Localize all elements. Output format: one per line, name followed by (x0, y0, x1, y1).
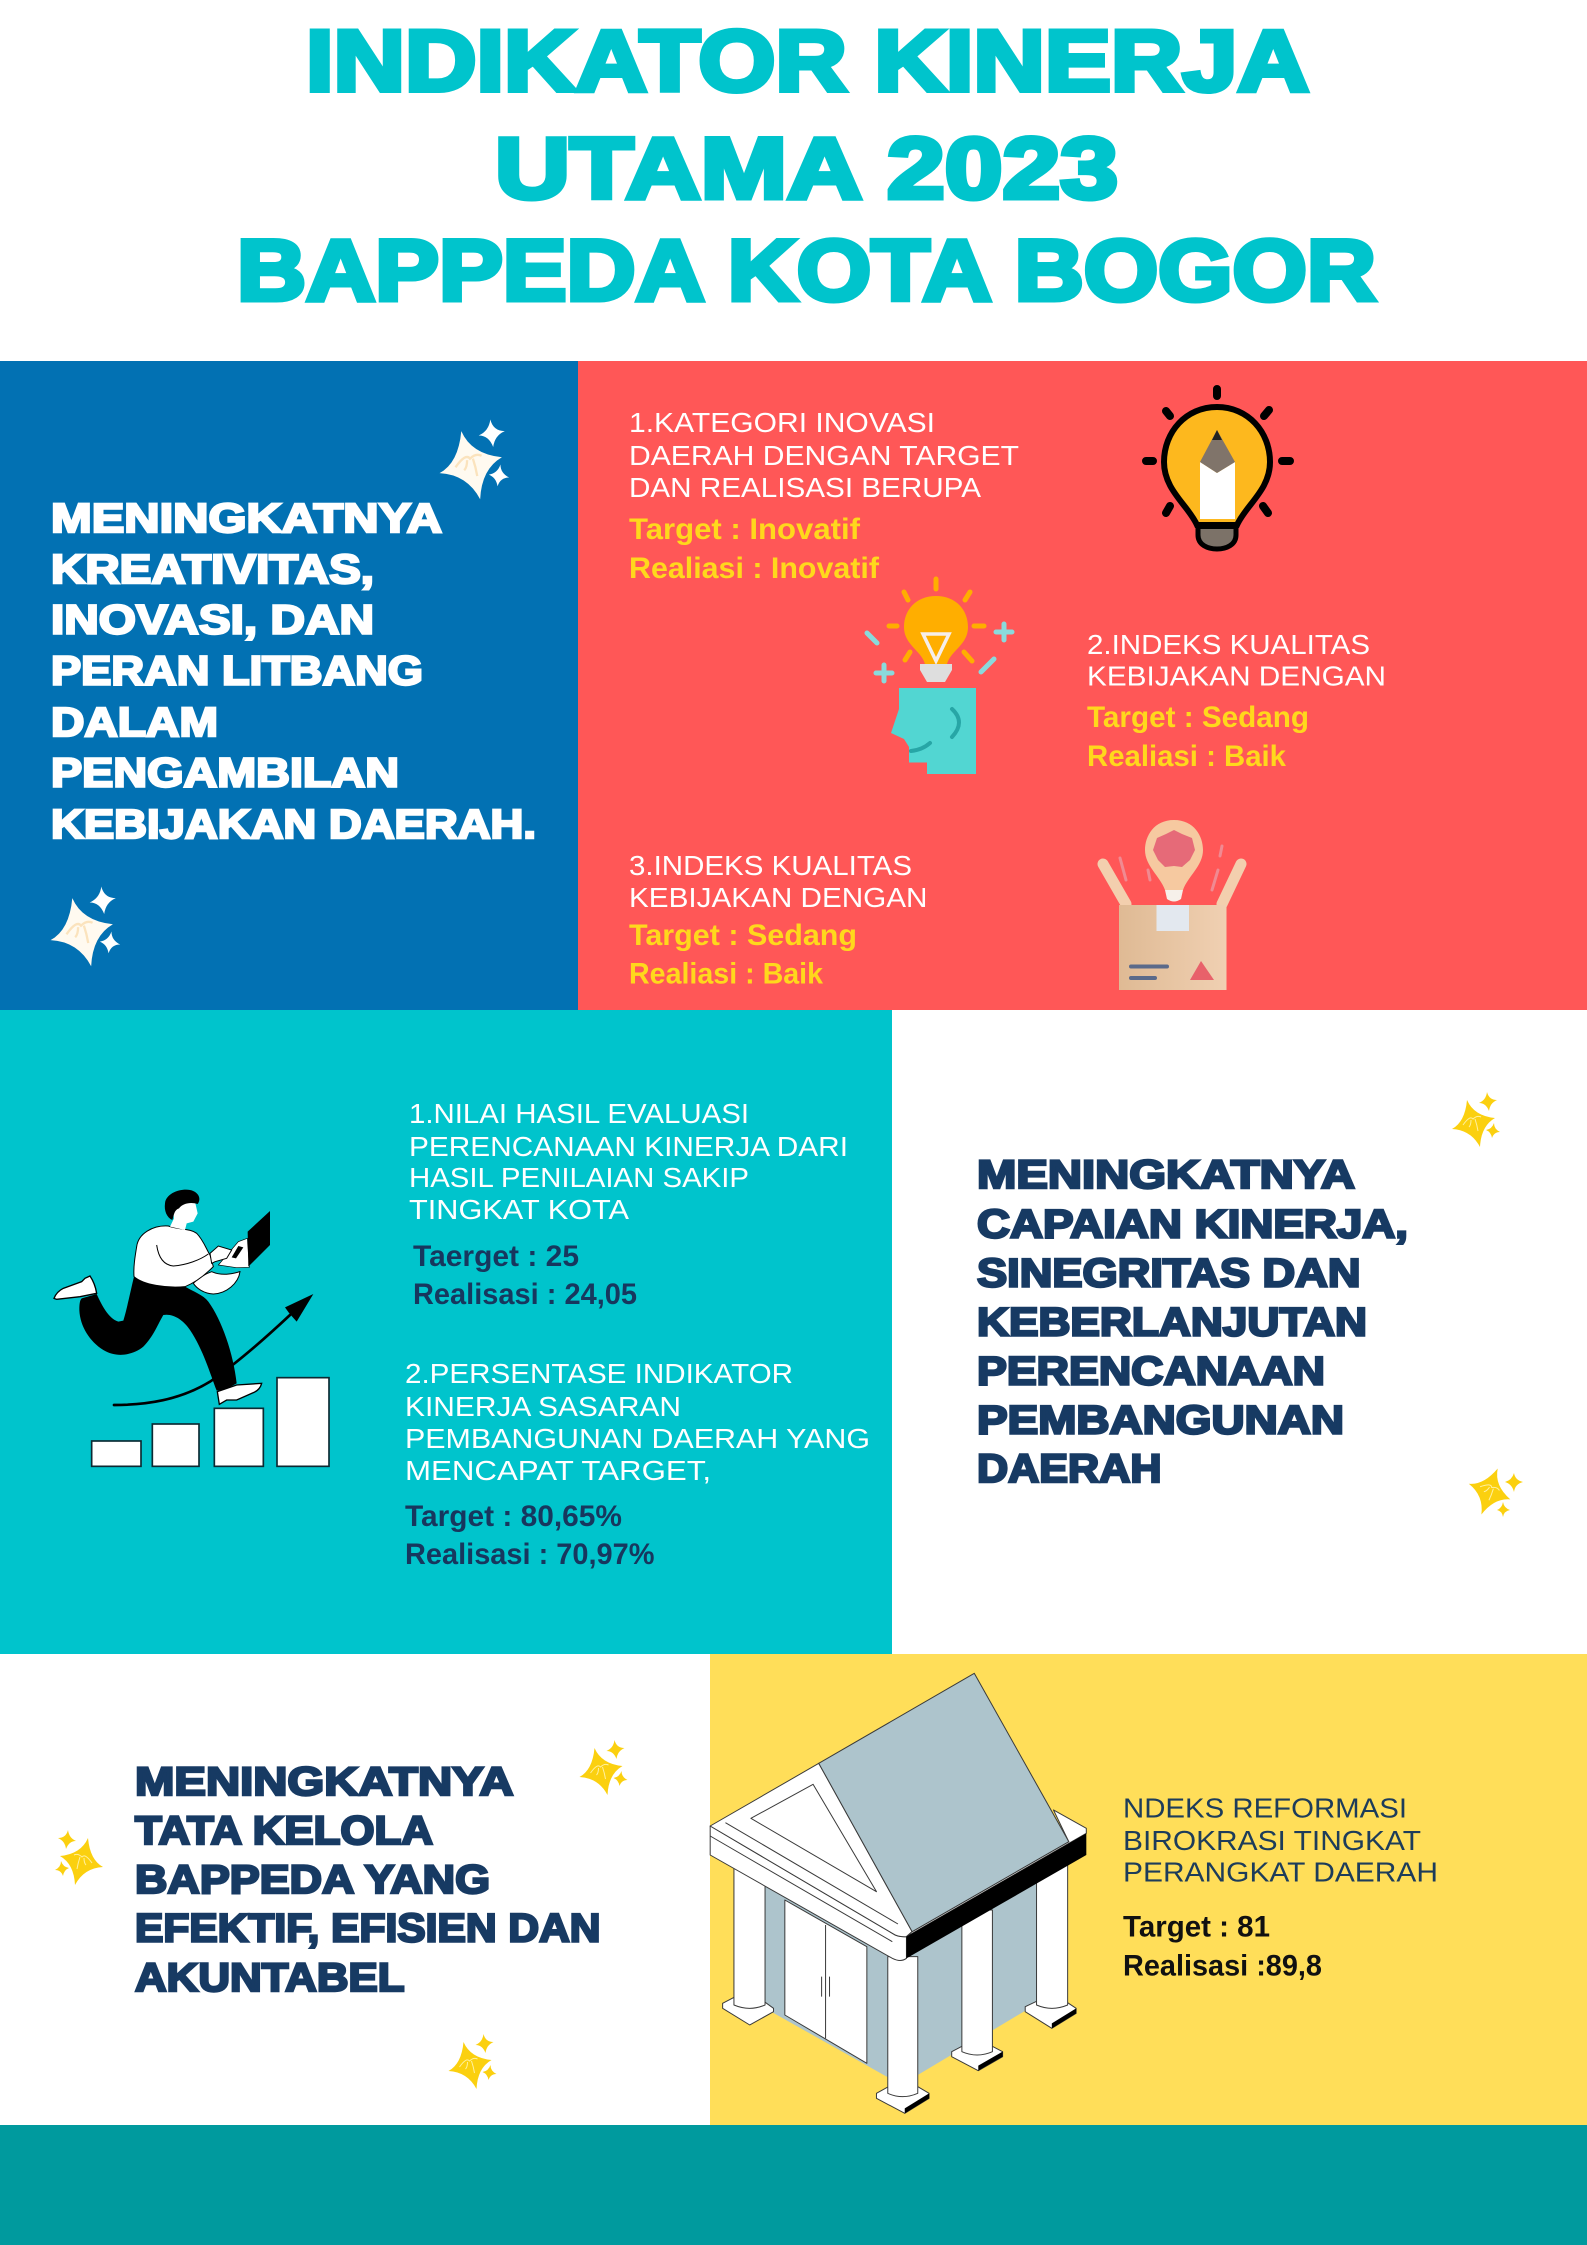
text: indicator teal 2 (405, 1358, 870, 1571)
text: indicator teal 2: Realisasi : 70,97% (405, 1538, 654, 1571)
text: yellow indicator: BIROKRASI TINGKAT (1123, 1825, 1421, 1856)
text: indicator 3: Target : Sedang (629, 919, 857, 952)
heading: goal 1: MENINGKATNYA (51, 495, 442, 541)
text: indicator teal 1: Taerget : 25 (413, 1240, 579, 1273)
icon: sparkle bottom (51, 886, 120, 966)
text: indicator 3: Realiasi : Baik (629, 958, 824, 990)
text: indicator teal 1: Realisasi : 24,05 (413, 1278, 637, 1311)
panel: teal indicators (0, 1010, 892, 1654)
heading: goal 2: SINEGRITAS DAN (977, 1252, 1360, 1296)
text: indicator 1: Target : Inovatif (629, 513, 860, 546)
heading: goal 2: KEBERLANJUTAN (977, 1300, 1367, 1344)
heading: goal 3: EFEKTIF, EFISIEN DAN (135, 1906, 600, 1950)
text: indicator 2: KEBIJAKAN DENGAN (1087, 660, 1386, 692)
heading: goal 1: PENGAMBILAN (51, 750, 399, 796)
icon: head with bulb (867, 579, 1012, 774)
title (237, 14, 1376, 319)
text: indicator teal 1: PERENCANAAN KINERJA DARI (409, 1131, 848, 1162)
heading: goal 1: DALAM (51, 699, 218, 745)
panel: white goal 3 (55, 1740, 628, 2089)
bar chart (92, 1378, 329, 1466)
text: indicator 2: Realiasi : Baik (1087, 740, 1287, 773)
text: indicator teal 2: PEMBANGUNAN DAERAH YANG (405, 1423, 870, 1454)
heading: goal 2: PERENCANAAN (977, 1350, 1325, 1394)
title: UTAMA 2023 (495, 121, 1118, 217)
panel: white goal 2 (977, 1092, 1523, 1523)
icon: sparkle top (440, 420, 509, 499)
text: indicator 2: 2.INDEKS KUALITAS (1087, 629, 1370, 660)
text: indicator 1 (629, 407, 1019, 585)
blue panel background (0, 361, 578, 1010)
icon: yellow sparkle lower (448, 2034, 496, 2089)
text: indicator 1: 1.KATEGORI INOVASI (629, 407, 935, 438)
heading: goal 1: PERAN LITBANG (51, 648, 423, 694)
illustration: government building (710, 1673, 1086, 2113)
icon: yellow sparkle left (55, 1830, 103, 1885)
illustration: running man on rising bars (54, 1190, 329, 1466)
heading: goal 1: KEBIJAKAN DAERAH. (51, 801, 536, 847)
icon: yellow sparkle upper right (580, 1740, 628, 1795)
heading: goal 2 (977, 1153, 1408, 1491)
heading: goal 3 (135, 1760, 600, 2000)
text: indicator teal 2: 2.PERSENTASE INDIKATOR (405, 1358, 793, 1389)
heading: goal 1: INOVASI, DAN (51, 596, 374, 642)
text: indicator teal 1: TINGKAT KOTA (409, 1194, 629, 1225)
title: BAPPEDA KOTA BOGOR (237, 223, 1376, 319)
heading: goal 1 (51, 495, 536, 847)
footer band (0, 2125, 1587, 2245)
text: indicator 3: KEBIJAKAN DENGAN (629, 882, 928, 913)
figure: running person (54, 1190, 270, 1404)
text: indicator 2 (1087, 629, 1386, 773)
title: INDIKATOR KINERJA (306, 14, 1309, 110)
icon: yellow sparkle bottom (1458, 1460, 1523, 1523)
heading: goal 3: AKUNTABEL (135, 1956, 404, 2000)
heading: goal 2: PEMBANGUNAN (977, 1398, 1344, 1442)
text: indicator teal 2: MENCAPAT TARGET, (405, 1455, 711, 1486)
teal panel background (0, 1010, 892, 1654)
text: indicator teal 1: 1.NILAI HASIL EVALUASI (409, 1098, 749, 1129)
heading: goal 1: KREATIVITAS, (51, 546, 374, 592)
icon: yellow sparkle top (1452, 1092, 1500, 1147)
text: yellow indicator: Realisasi :89,8 (1123, 1950, 1322, 1982)
panel: red indicators (578, 361, 1587, 1010)
text: yellow indicator: PERANGKAT DAERAH (1123, 1856, 1438, 1888)
heading: goal 3: BAPPEDA YANG (135, 1858, 490, 1902)
text: indicator teal 1: HASIL PENILAIAN SAKIP (409, 1162, 749, 1193)
text: indicator teal 2: KINERJA SASARAN (405, 1391, 681, 1422)
heading: goal 2: DAERAH (977, 1447, 1162, 1491)
panel: blue goal 1 (0, 361, 578, 1010)
arrow: rising curve (114, 1294, 313, 1405)
text: indicator 3: 3.INDEKS KUALITAS (629, 850, 912, 881)
yellow panel background (710, 1654, 1587, 2125)
text: indicator 1: Realiasi : Inovatif (629, 552, 879, 585)
heading: goal 3: TATA KELOLA (135, 1809, 433, 1853)
panel: yellow indicator (710, 1654, 1587, 2125)
text: indicator 3 (629, 850, 928, 990)
text: indicator 1: DAERAH DENGAN TARGET (629, 440, 1019, 471)
text: indicator 2: Target : Sedang (1087, 701, 1309, 734)
red panel background (578, 361, 1587, 1010)
heading: goal 3: MENINGKATNYA (135, 1760, 514, 1804)
text: indicator teal 2: Target : 80,65% (405, 1500, 622, 1533)
icon: box with bulb (1103, 820, 1241, 990)
heading: goal 2: CAPAIAN KINERJA, (977, 1202, 1408, 1246)
text: indicator 1: DAN REALISASI BERUPA (629, 472, 981, 503)
text: yellow indicator (1123, 1792, 1438, 1982)
text: indicator teal 1 (409, 1098, 848, 1311)
heading: goal 2: MENINGKATNYA (977, 1153, 1355, 1197)
icon: pencil light bulb (1146, 389, 1290, 549)
text: yellow indicator: NDEKS REFORMASI (1123, 1792, 1407, 1824)
text: yellow indicator: Target : 81 (1123, 1910, 1270, 1944)
